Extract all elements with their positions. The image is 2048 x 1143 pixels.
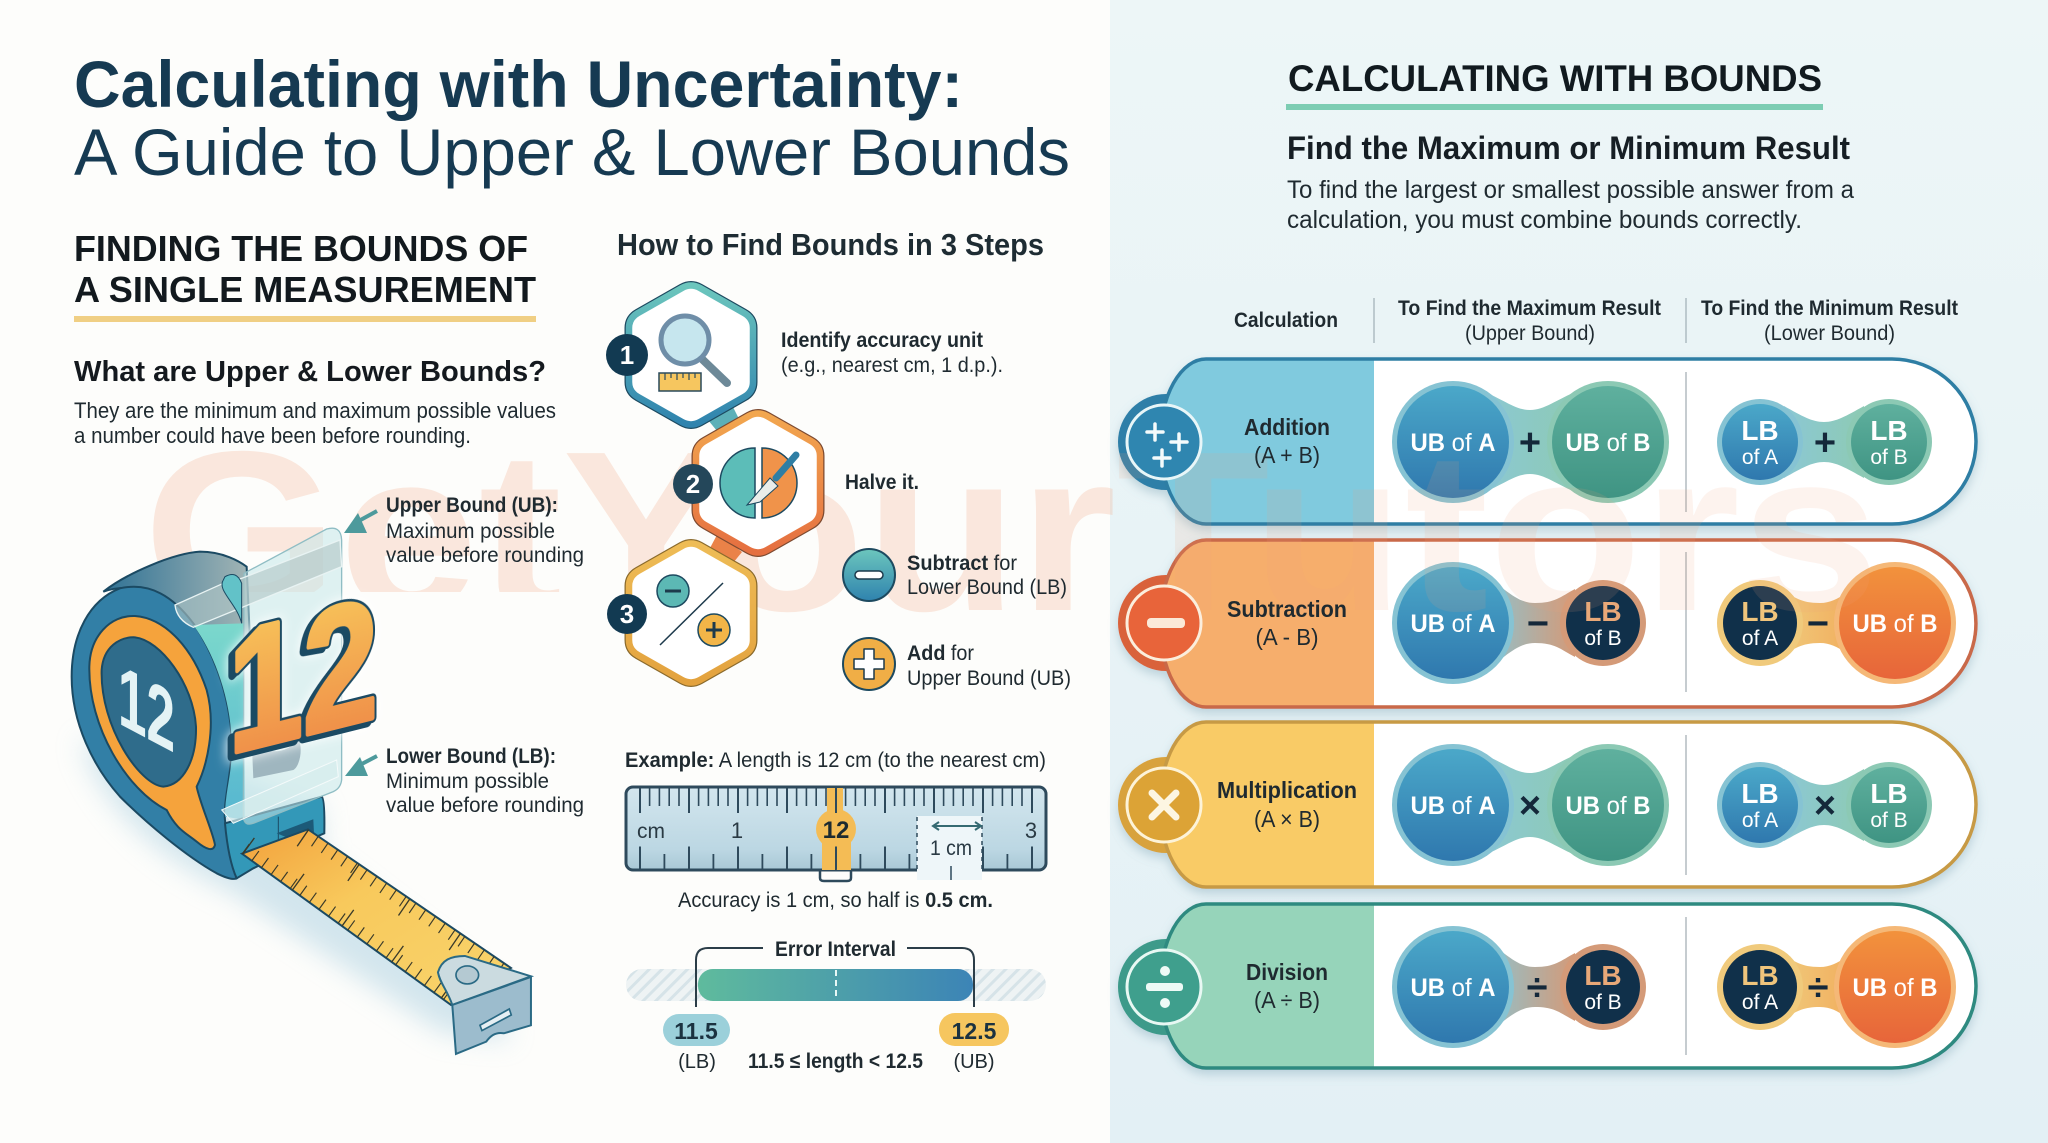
hexagon: step 3 (629, 544, 753, 682)
ruler labels: cm (637, 820, 665, 843)
lower value (663, 1014, 730, 1073)
hexagon: step 2 (696, 414, 820, 552)
callout: lower bound (386, 745, 584, 817)
tape blade (242, 829, 511, 1005)
upper value: 12.5 (952, 1018, 997, 1044)
steps: hexagon chain (606, 286, 820, 682)
large number 3D: 12 (223, 565, 373, 796)
formula: division maximum (1410, 960, 1622, 1014)
table header: (Lower Bound) (1764, 322, 1895, 345)
formula: multiplication minimum: LB (1870, 778, 1908, 809)
text block: what are bounds: a number could have been before rounding. (74, 423, 471, 448)
icon: multiplication (1127, 768, 1201, 842)
row: multiplication (1127, 768, 1908, 842)
hexagon: step 1 (629, 286, 753, 424)
bubbles: subtraction maximum (1392, 562, 1646, 684)
text block: what are bounds: What are Upper & Lower Bounds? (74, 356, 546, 388)
table header (1234, 297, 1958, 345)
error interval: Error Interval (775, 938, 896, 961)
illustration: tape measure (72, 528, 531, 1054)
bubbles: multiplication minimum (1717, 762, 1932, 848)
label: subtraction: Subtraction (1227, 596, 1347, 622)
heading: finding the bounds: FINDING THE BOUNDS OF (74, 228, 528, 269)
table header: (Upper Bound) (1465, 322, 1595, 345)
bubbles: multiplication maximum (1392, 744, 1669, 866)
label: addition: Addition (1244, 414, 1330, 440)
callout: upper bound: Upper Bound (UB): (386, 494, 558, 517)
icon: division (1127, 950, 1201, 1024)
formula: multiplication maximum: × (1519, 785, 1541, 827)
text: subtract (907, 552, 1067, 599)
example text: Example: A length is 12 cm (to the nearest cm) (625, 749, 1046, 772)
table header: Calculation (1234, 309, 1338, 332)
formula: addition minimum (1741, 415, 1908, 469)
formula: division maximum: ÷ (1527, 967, 1547, 1009)
icon: magnifier and ruler (659, 316, 727, 391)
formula: addition minimum: + (1814, 422, 1836, 464)
callout: upper bound: value before rounding (386, 544, 584, 567)
badge: step 1 (606, 334, 648, 376)
badge: step 3 (607, 594, 647, 634)
icon: subtract (843, 549, 895, 601)
background: left panel (0, 0, 1110, 1143)
formula: subtraction minimum: − (1807, 603, 1829, 645)
formula: addition minimum: of B (1870, 446, 1908, 469)
label: addition (1244, 414, 1330, 468)
table header: To Find the Minimum Result (1701, 297, 1958, 320)
dial number: 12 (118, 646, 175, 772)
formula: addition maximum: UB of B (1566, 429, 1650, 457)
badge: step 2: 2 (686, 469, 700, 499)
upper value: (UB) (953, 1051, 995, 1073)
formula: division minimum (1741, 960, 1938, 1014)
large number 3D: 12 (228, 561, 378, 791)
formula: addition maximum: + (1519, 422, 1541, 464)
right intro: calculation, you must combine bounds correctly. (1287, 206, 1802, 234)
icon: addition (1127, 405, 1201, 479)
text block: what are bounds (74, 356, 556, 448)
callout: lower bound: value before rounding (386, 794, 584, 817)
title: A Guide to Upper & Lower Bounds (74, 115, 1070, 189)
formula: addition maximum: UB of A (1410, 429, 1496, 457)
icon: minus and plus (657, 575, 730, 646)
formula: multiplication maximum (1410, 785, 1650, 827)
formula: subtraction minimum (1741, 596, 1938, 650)
accuracy note: Accuracy is 1 cm, so half is 0.5 cm. (678, 889, 993, 912)
formula: addition minimum: of A (1742, 446, 1778, 469)
label: addition: (A + B) (1254, 442, 1320, 468)
large number 3D: 12 (228, 561, 378, 791)
row: addition (1127, 405, 1908, 479)
callout: lower bound: Minimum possible (386, 770, 549, 793)
callout: upper bound (386, 494, 584, 567)
callout: lower bound: Lower Bound (LB): (386, 745, 556, 768)
label: division: Division (1246, 959, 1328, 985)
heading: finding the bounds: A SINGLE MEASUREMENT (74, 269, 536, 310)
arrow: 1 cm span (933, 822, 981, 830)
formula: multiplication minimum: × (1814, 785, 1836, 827)
bubbles: addition minimum (1717, 399, 1932, 485)
bubbles: subtraction minimum (1717, 562, 1956, 684)
step 1 text: Identify accuracy unit (781, 329, 983, 352)
heading: how to find bounds: How to Find Bounds in 3 Steps (617, 227, 1044, 262)
ruler labels (637, 817, 1037, 860)
icon: add (843, 638, 895, 690)
title (74, 47, 1070, 189)
right intro: Find the Maximum or Minimum Result (1287, 130, 1850, 166)
panel: calculating with bounds rows (1118, 359, 1976, 1068)
error interval (626, 938, 1046, 1073)
formula: addition minimum: LB (1741, 415, 1779, 446)
bubbles: division maximum (1392, 926, 1646, 1048)
text: subtract: Lower Bound (LB) (907, 576, 1067, 599)
arrow: upper bound (344, 511, 377, 533)
connector: step 1 to 2 (708, 407, 742, 437)
right heading: CALCULATING WITH BOUNDS (1288, 58, 1822, 99)
upper value (939, 1013, 1009, 1073)
connector: step 2 to 3 (710, 533, 742, 563)
formula: subtraction maximum: of B (1584, 627, 1622, 650)
formula: subtraction maximum: UB of A (1410, 610, 1496, 638)
formula: addition maximum (1410, 422, 1650, 464)
formula: subtraction minimum: UB of B (1852, 610, 1938, 638)
background: right panel (1110, 0, 2048, 1143)
badge: step 2 (673, 464, 713, 504)
right intro: To find the largest or smallest possible answer from a (1287, 176, 1854, 204)
lower value: (LB) (678, 1051, 716, 1073)
formula: multiplication maximum: UB of A (1410, 792, 1496, 820)
formula: multiplication minimum (1741, 778, 1908, 832)
label: subtraction (1227, 596, 1347, 650)
formula: division maximum: LB (1584, 960, 1622, 991)
badge: step 1: 1 (620, 340, 634, 370)
text: add: Upper Bound (UB) (907, 667, 1071, 690)
ruler labels: 1 (731, 818, 743, 843)
label: subtraction: (A - B) (1256, 624, 1318, 650)
formula: subtraction minimum: of A (1742, 627, 1778, 650)
tape hook (438, 956, 531, 1054)
formula: subtraction minimum: LB (1741, 596, 1779, 627)
formula: division minimum: ÷ (1808, 967, 1828, 1009)
title: Calculating with Uncertainty: (74, 47, 963, 121)
formula: division maximum: UB of A (1410, 974, 1496, 1002)
formula: multiplication minimum: of A (1742, 809, 1778, 832)
right intro (1287, 130, 1854, 234)
text block: what are bounds: They are the minimum and maximum possible values (74, 398, 556, 423)
step 2 text: Halve it. (845, 471, 919, 494)
row shape: multiplication (1118, 722, 1976, 887)
error interval: 11.5 ≤ length < 12.5 (748, 1050, 923, 1073)
formula: subtraction maximum (1410, 596, 1622, 650)
step 1 text (781, 329, 1003, 377)
table header: To Find the Maximum Result (1398, 297, 1661, 320)
step 1 text: (e.g., nearest cm, 1 d.p.). (781, 354, 1003, 377)
lower value: 11.5 (674, 1018, 718, 1044)
ruler labels: 1 cm (930, 837, 972, 860)
formula: division maximum: of B (1584, 991, 1622, 1014)
formula: subtraction maximum: LB (1584, 596, 1622, 627)
row: division (1127, 950, 1938, 1024)
text: subtract: Subtract for (907, 552, 1017, 575)
ruler labels: 3 (1025, 818, 1037, 843)
label: division: (A ÷ B) (1254, 987, 1320, 1013)
icon: subtraction (1127, 586, 1201, 660)
ruler labels: 12 (823, 817, 849, 844)
callout: upper bound: Maximum possible (386, 520, 555, 543)
row shape: addition (1118, 359, 1976, 524)
arrow: lower bound (345, 756, 377, 776)
row: subtraction (1127, 586, 1938, 660)
formula: subtraction maximum: − (1527, 603, 1549, 645)
ruler (626, 787, 1046, 881)
text: add: Add for (907, 642, 974, 665)
badge: step 3: 3 (620, 599, 634, 629)
label: multiplication: Multiplication (1217, 777, 1357, 803)
row shape: division (1118, 904, 1976, 1068)
bubbles: division minimum (1717, 926, 1956, 1048)
formula: multiplication minimum: of B (1870, 809, 1908, 832)
icon: pie and knife (720, 448, 797, 518)
heading: finding the bounds (74, 228, 536, 322)
formula: division minimum: LB (1741, 960, 1779, 991)
text: add (907, 642, 1071, 690)
formula: addition minimum: LB (1870, 415, 1908, 446)
row shape: subtraction (1118, 540, 1976, 707)
formula: multiplication maximum: UB of B (1566, 792, 1650, 820)
bubbles: addition maximum (1392, 381, 1669, 503)
label: multiplication: (A × B) (1254, 806, 1320, 832)
formula: division minimum: UB of B (1852, 974, 1938, 1002)
formula: division minimum: of A (1742, 991, 1778, 1014)
label: multiplication (1217, 777, 1357, 832)
formula: multiplication minimum: LB (1741, 778, 1779, 809)
label: division (1246, 959, 1328, 1013)
watermark: GetYour Tutors (143, 405, 1880, 659)
